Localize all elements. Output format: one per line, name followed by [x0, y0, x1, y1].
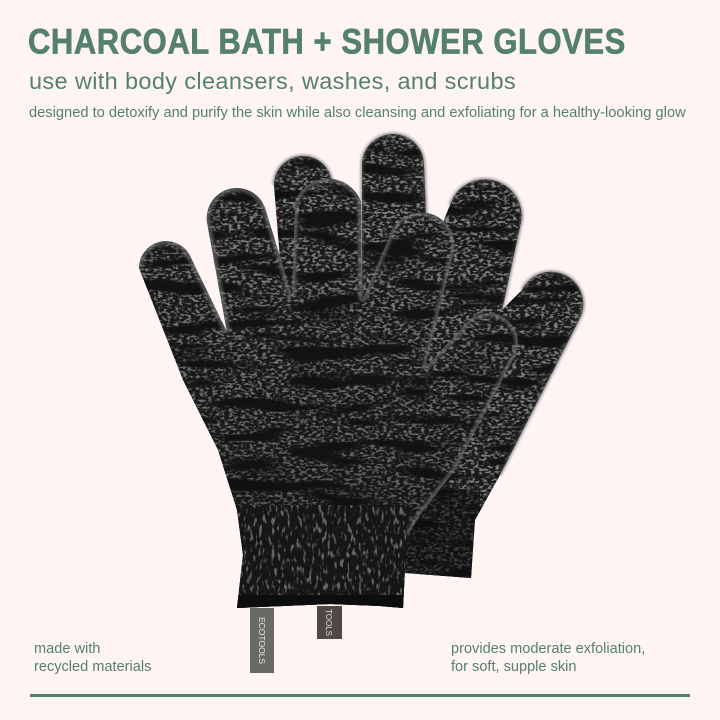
description: designed to detoxify and purify the skin while also cleansing and exfoliating for a healthy-looking glow	[29, 105, 686, 121]
glove: back	[260, 130, 590, 639]
tag: back	[317, 606, 342, 639]
bottom rule	[30, 694, 690, 697]
finger edge shading	[139, 179, 518, 535]
tag: back: TOOLS	[324, 609, 333, 636]
tag: front: ECOTOOLS	[257, 617, 267, 664]
glove: front	[130, 165, 520, 673]
caption: exfoliation	[451, 641, 645, 675]
gloves illustration	[139, 131, 586, 673]
caption: recycled materials: made with	[34, 641, 100, 657]
subtitle: use with body cleansers, washes, and scrubs	[29, 68, 516, 94]
caption: recycled materials	[34, 641, 151, 675]
caption: exfoliation: provides moderate exfoliation,	[451, 641, 645, 657]
caption: exfoliation: for soft, supple skin	[451, 659, 576, 675]
caption: recycled materials: recycled materials	[34, 659, 151, 675]
tag: front	[250, 608, 274, 673]
title: CHARCOAL BATH + SHOWER GLOVES	[28, 21, 626, 61]
